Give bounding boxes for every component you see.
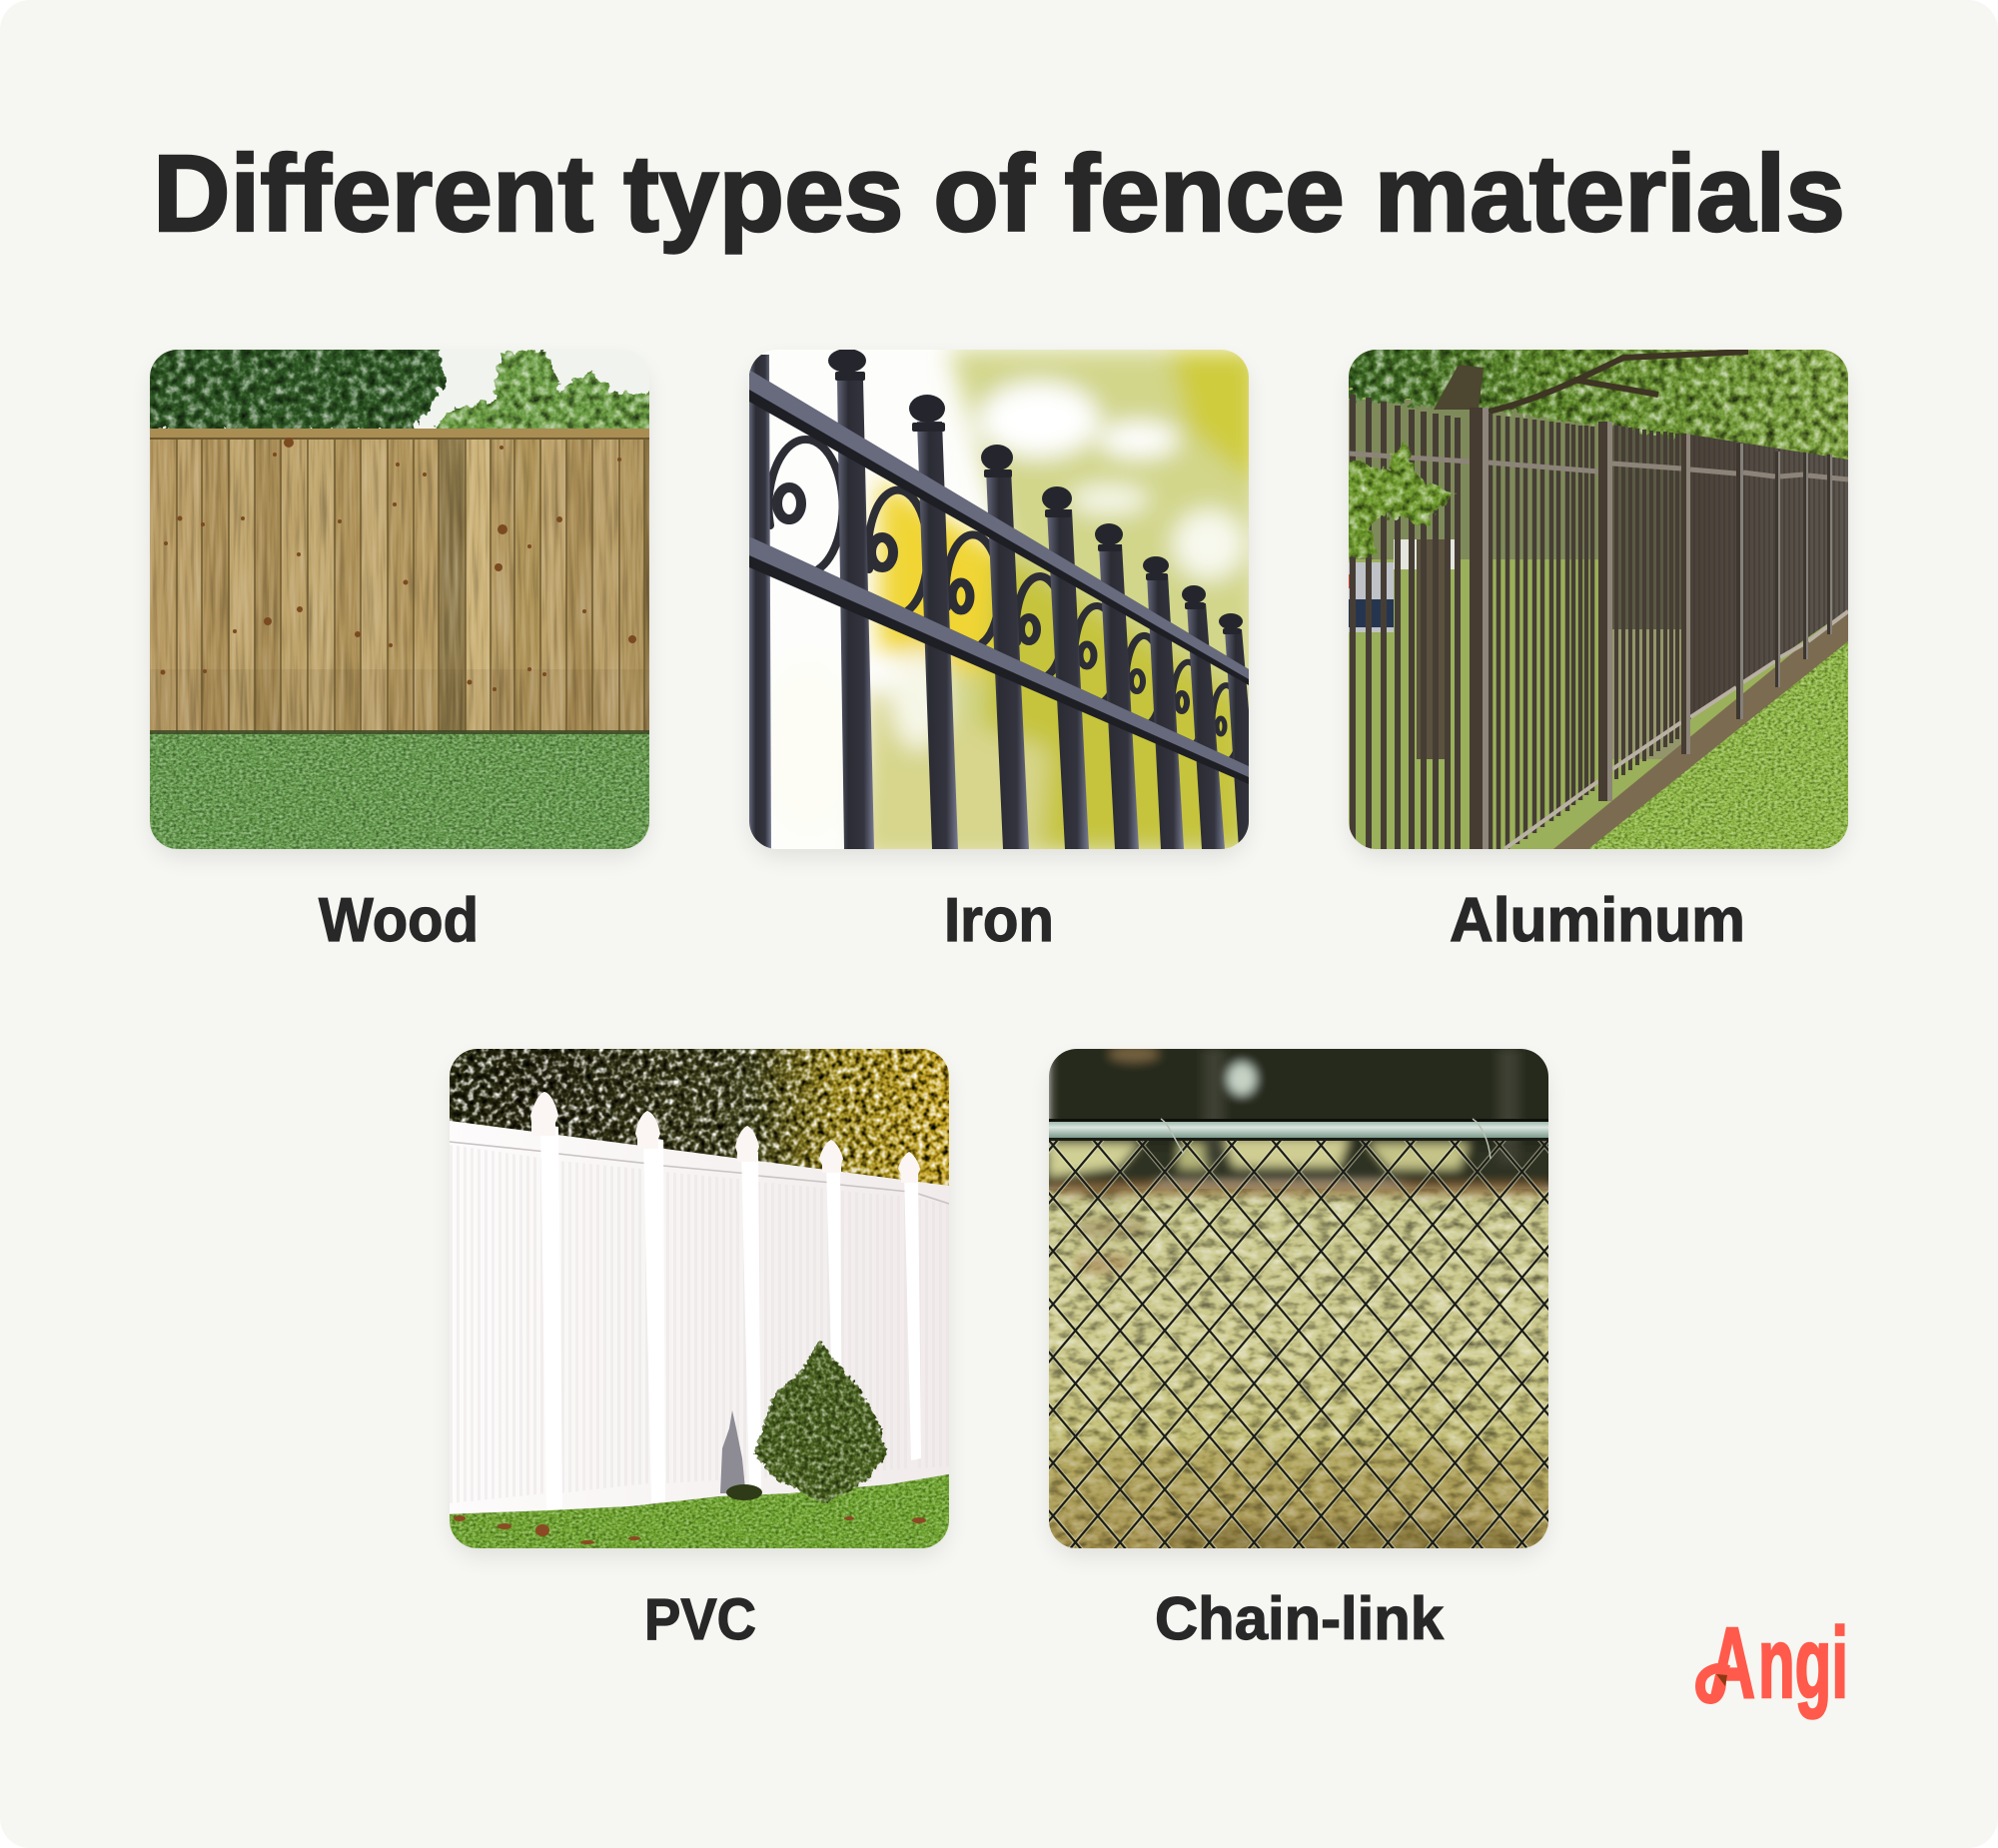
pickets [1353,395,1458,849]
tree canopy [1349,350,1848,460]
finials [530,1092,920,1183]
light trees [434,350,649,429]
panel: PVC fence [440,1039,959,1652]
label: Chain-link: Chain-link [1155,1585,1445,1652]
foreground leaves [1339,440,1457,559]
logo letters ngi: ngi [1758,1607,1848,1719]
board grooves [177,440,644,732]
dark background band [1349,400,1598,559]
photo shadow [452,1061,947,1556]
blurred background [865,350,1249,849]
logo loop [1700,1668,1728,1699]
logo: Angi [1700,1607,1848,1719]
photo: aluminum fence [1339,340,1858,849]
parked car [1349,562,1394,632]
upper rail [749,370,1249,685]
dark trees [150,350,447,429]
lower rail [749,536,1249,784]
grass [150,732,649,849]
photo: chain-link fence [1039,1039,1568,1558]
scrollwork [768,440,1240,759]
label: Wood: Wood [319,886,479,955]
bush shadow [720,1410,745,1493]
label: Aluminum: Aluminum [1450,886,1745,955]
solid-looking far fence [1690,435,1848,719]
top rails [1349,454,1848,479]
finials [828,349,1243,634]
logo fold [1716,1674,1727,1686]
mesh [1049,1138,1548,1548]
dark tree line [1039,1039,1568,1199]
photo shadow [751,362,1247,857]
dirt strip [1553,607,1848,849]
logo letter A: A [1709,1607,1755,1719]
fence ribs [450,1145,546,1503]
photo shadow [1051,1061,1546,1556]
grass [445,1473,954,1553]
wire ties [1161,1119,1491,1159]
label: Iron: Iron [944,886,1054,955]
top rail [150,429,649,438]
lower leaf debris [1049,1219,1548,1558]
panel: chain-link fence [1039,1039,1568,1652]
wood boards [150,435,649,734]
tree branches [1489,352,1748,412]
photo: iron fence [749,349,1261,859]
panel: aluminum fence [1339,340,1858,955]
small shrub [726,1484,762,1500]
panel: iron fence [749,349,1261,955]
posts [1470,408,1485,849]
autumn foliage [440,1039,959,1209]
bush [754,1341,887,1503]
photo: PVC fence [440,1039,959,1553]
white fence wall [450,1121,949,1518]
photo shadow [152,362,647,857]
bottom rail [1504,611,1848,849]
grass [1586,633,1848,849]
ground [1049,1189,1548,1548]
photo shadow [1351,362,1846,857]
top rail [1049,1119,1548,1122]
photo: wood fence [140,340,659,849]
label: PVC: PVC [644,1587,756,1652]
title: Different types of fence materials [153,133,1845,255]
posts [749,355,1261,849]
posts [540,1124,921,1510]
panel: wood fence [140,340,659,955]
fallen leaves [454,1515,926,1544]
top rail line [450,1142,949,1204]
wood knots [160,438,636,691]
tree trunk [1434,365,1484,410]
